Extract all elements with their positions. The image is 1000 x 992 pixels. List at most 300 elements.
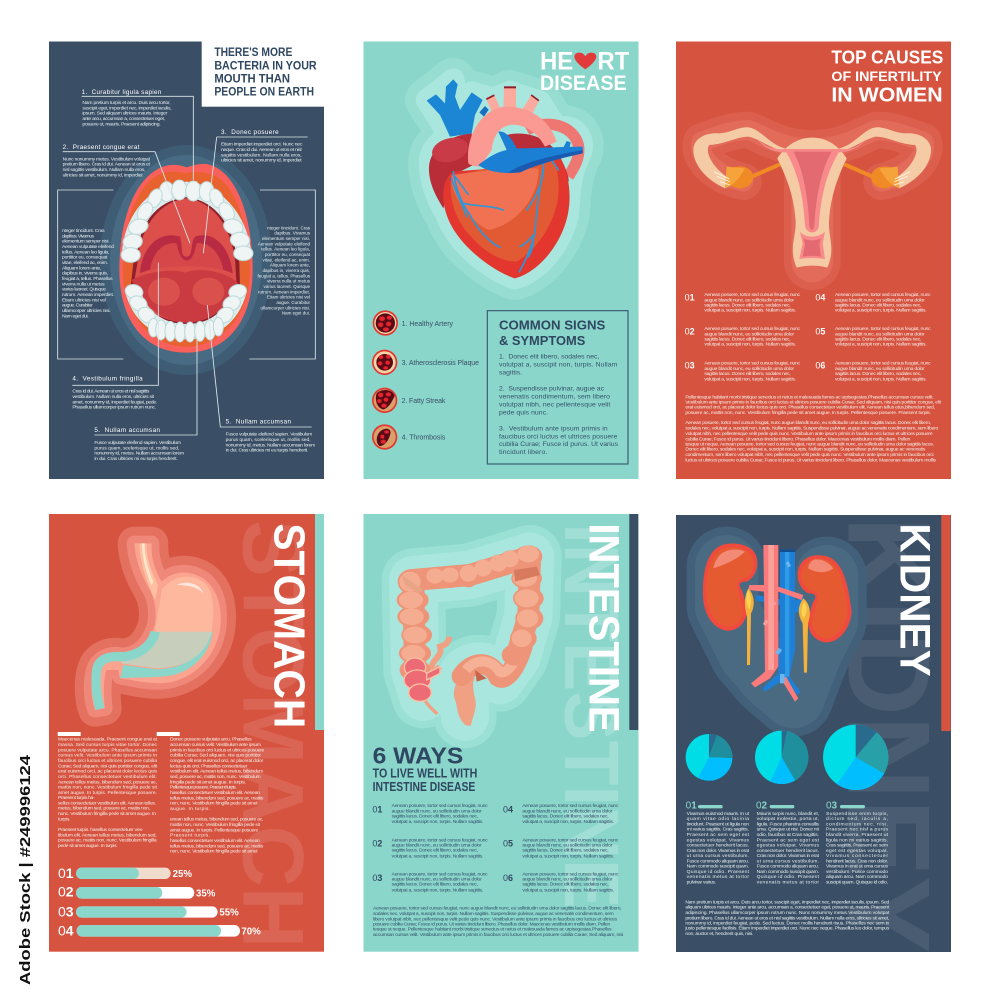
column text: Praesent nec nisl a purus: [826, 827, 888, 833]
lower teeth: [123, 283, 248, 342]
title box: [202, 42, 324, 107]
cause text columns: augue blandit nunc, eu sollicitudin urna dolor: [835, 297, 925, 303]
column text: venenatis metus at tortor: [687, 874, 749, 880]
callout: common signs and symptoms: 1. Donec elit libero, sodales nec,: [499, 354, 599, 361]
title: top causes: [831, 46, 943, 107]
pie legends: [684, 800, 890, 937]
cause text columns: volutpat a, suscipit non, turpis. Nullam sagittis.: [835, 342, 927, 348]
body paragraph: aliquam ultrices mauris. Integer ante arcu, accumsan a, consectetuer eget, posuere ut, mauris. Praesent: [685, 905, 890, 911]
panel: heart disease: [364, 42, 638, 479]
column text: ut urna cursus vestibulum.: [687, 853, 749, 859]
number markers: 02: [372, 838, 382, 848]
accent dashes: [58, 732, 180, 736]
mouth labels and text blocks: Nam pretium turpis et arcu. Duis arcu tortor,: [82, 100, 171, 106]
body paragraphs: Pellentesque habitant morbi tristique senectus et netus et malesuada fames ac urpisegestas.Phasellus accumsan cursus velit.: [685, 394, 934, 400]
mouth labels and text blocks: varius laoreet. Quisque: [62, 287, 106, 293]
column text: ut urna cursus vestibulum.: [757, 858, 819, 864]
stomach text columns: Praesent turpis.ha-: [58, 795, 95, 801]
mouth labels and text blocks: 1. Curabitur ligula sapien: [82, 89, 162, 96]
accent bar: [629, 514, 638, 730]
column text: hendrerit lacus. Cras non dolor.: [826, 858, 888, 864]
six ways list: [372, 803, 623, 938]
heading: 6 ways: [373, 742, 477, 794]
mouth labels and text blocks: ultricies sit amet, nonummy id, imperdiet: [221, 158, 302, 164]
stomach text columns: turpis.: [58, 816, 71, 822]
mouth labels and text blocks: sagittis vestibulum. Nullam nulla eros,: [221, 152, 302, 158]
mouth labels and text blocks: 4. Vestibulum fringilla: [72, 376, 143, 383]
column text: tincidunt. Praesent ut ligula non: [687, 821, 749, 827]
stomach text columns: tellus metus, bibendum sed, posuere ac, mattis: [170, 795, 264, 801]
callout: common signs and symptoms: sagittis.: [499, 370, 522, 377]
stomach text columns: Praesent turpis. hasellus consectetuer ves-: [58, 827, 144, 833]
column text: ligula. Fusce pharetra convallis: [757, 821, 819, 827]
cause text columns: augue blandit nunc, eu sollicitudin urna dolor: [704, 297, 794, 303]
stomach text columns: vestibulum elit. Aenean tellus metus, bibendum: [170, 769, 263, 775]
mouth labels and text blocks: vestibulum. Nullam nulla eros, ultricies sit: [72, 394, 155, 400]
ureters: [745, 588, 754, 665]
stomach text columns: Maecenas malesuada. Praesent congue erat at: [58, 737, 158, 743]
cause text columns: volutpat a, suscipit non, turpis. Nullam sagittis.: [704, 342, 796, 348]
title: stomach: STOMACH: [264, 523, 313, 728]
column text: Vivamus euismod mauris. In ut: [687, 811, 750, 817]
column text: Vivamus in erat ut urna cursus: [826, 864, 888, 870]
stomach text columns: hasellus consectetuer vestibulum elit. Aenean: [170, 838, 260, 844]
number markers: [685, 293, 825, 371]
artery stage labels: 1. Healthy Artery: [402, 321, 453, 328]
left tube and ovary: [693, 127, 785, 188]
stomach text columns: cursus velit. Vestibulum ante ipsum primis in: [58, 753, 157, 759]
artery stage labels: [402, 321, 479, 441]
body paragraphs: tesque ut neque. Aenean posuere, tortor sed cursus feugiat, nunc augue blandit nunc, eu sollicitudin urna dolor sagittis lacus.: [685, 442, 934, 448]
title box: MOUTH THAN: [214, 72, 290, 86]
body paragraph: posuere cubilia Curae; Fusce id purus. Ut varius tincidunt libero. Phasellus dolor. Maecenas vestibulum mollis diam. Pellen: [373, 921, 611, 927]
stomach text columns: mattis non, nunc. Vestibulum fringilla pede sit: [170, 822, 261, 828]
mouth labels and text blocks: suscipit eget, imperdiet nec, imperdiet iaculis,: [82, 105, 172, 111]
title: top causes: IN WOMEN: [831, 84, 943, 107]
cause text columns: volutpat a, suscipit non, turpis. Nullam sagittis.: [704, 376, 796, 382]
body paragraph: nonummy id, imperdiet feugiat, pede. Sed lectus. Donec mollis hendrerit risus. Phasellus nec sem in: [685, 921, 890, 927]
column text: dictum sed, iaculis a,: [826, 816, 888, 822]
column text: consectetuer hendrerit lacus.: [687, 843, 749, 849]
pie legends: 01: [686, 800, 697, 811]
progress bars: 03: [58, 904, 74, 920]
heading: 6 ways: INTESTINE DISEASE: [373, 780, 475, 794]
way text columns: augue blandit nunc, eu sollicitudin urna dolor: [522, 808, 613, 814]
artery stage labels: 4. Thrombosis: [402, 434, 446, 441]
way text columns: augue blandit nunc, eu sollicitudin urna dolor: [522, 843, 613, 849]
number markers: 06: [815, 361, 825, 371]
way text columns: sagittis lacus. Donec elit libero, sodales nec,: [392, 813, 478, 819]
accent bar: [941, 515, 951, 731]
accent bar: [315, 514, 324, 730]
mouth labels and text blocks: viverra nulla ut metus: [267, 279, 311, 284]
body paragraph: adipiscing. Phasellus ullamcorper ipsum rutrum nunc. Nunc nonummy metus.Vestibulum volutpat: [685, 910, 890, 916]
mouth labels and text blocks: feugiat a, tellus. Phasellus: [258, 273, 311, 278]
title: top causes: OF INFERTILITY: [831, 68, 942, 84]
column text: Suspendisse enim turpis,: [826, 811, 888, 817]
stomach text columns: massa. Sed cursus turpis vitae tortor. Donec: [58, 742, 157, 748]
mouth labels and text blocks: ipsum. Sed aliquam ultrices mauris. Integer: [82, 111, 168, 117]
cause text columns: augue blandit nunc, eu sollicitudin urna dolor: [835, 331, 925, 337]
pie 2: [755, 731, 808, 784]
body paragraph: [684, 899, 890, 937]
stomach text columns: Curae; Sed aliquam, nisi quis porttitor congue, elit: [58, 763, 158, 769]
callout: common signs and symptoms: 2. Suspendisse pulvinar, augue ac: [499, 386, 605, 393]
body paragraphs: erat euismod orci, ac placerat dolor lectus quis orci. Phasellus consectetuer vestibulum elit. Aenean tellus etus,bibendum sed,: [685, 405, 935, 411]
callout: common signs and symptoms: COMMON SIGNS: [499, 317, 605, 332]
column text: odio, faucibus at Cras sagittis.: [757, 832, 819, 838]
cause text columns: Aenean posuere, tortor sed cursus feugiat, nunc: [835, 361, 931, 367]
mouth labels and text blocks: dapibus. Vivamus: [274, 231, 311, 236]
stomach text columns: amet augue. In turpis. Pellentesque posuere.: [58, 790, 157, 796]
stomach text columns: nunc. Vestibulum fringilla pede sit amet augue. In: [58, 811, 156, 817]
mouth labels and text blocks: Etiam imperdiet imperdiet orci. Nunc nec: [221, 142, 303, 148]
title: heart disease: [540, 48, 629, 95]
body paragraph: non, auctor et, hendrerit quis, nisi.: [685, 931, 753, 937]
pie charts: [686, 725, 888, 790]
mouth labels and text blocks: Aliquam lorem ante,: [62, 265, 101, 271]
number markers: 05: [503, 838, 513, 848]
panel: intestine: [364, 514, 638, 952]
artery stage icons: [372, 310, 398, 450]
way text columns: volutpat a, suscipit non, turpis. Nullam sagittis.: [522, 853, 614, 859]
stomach text columns: erat euismod orci, ac placerat dolor lectus quis: [58, 769, 157, 775]
mouth labels and text blocks: Fusce vulputate eleifend sapien. Vestibulum: [226, 432, 312, 438]
vessels: [452, 160, 558, 272]
title: heart disease: RT: [597, 48, 629, 75]
way text columns: augue blandit nunc, eu sollicitudin urna dolor: [392, 877, 482, 883]
mouth labels and text blocks: varius laoreet. Quisque: [264, 284, 310, 289]
way text columns: [392, 803, 619, 893]
way text columns: Aenean posuere, tortor sed cursus feugiat, nunc: [522, 871, 619, 877]
column text: aliquam arcu. Nam commodo: [826, 874, 888, 880]
mouth labels and text blocks: 3. Donec posuere: [221, 129, 279, 136]
stomach text columns: amet augue. In turpis. Pellentesque posuere: [170, 827, 259, 833]
stomach text columns: primis in faucibus orci luctus et ultrices posuere: [170, 747, 265, 753]
mouth labels and text blocks: ullamcorper ultricies nisi.: [62, 308, 111, 314]
stomach text columns: enean tellus metus, bibendum sed, posuere ac,: [170, 817, 263, 823]
way text columns: volutpat a, suscipit non, turpis. Nullam sagittis.: [392, 853, 483, 859]
body paragraph: Aenean posuere, tortor sed cursus feugiat, nunc augue blandit nunc, eu sollicitudin urna dolor sagittis lacus. Donec elit libero,: [373, 906, 622, 912]
number markers: 06: [503, 873, 513, 883]
mouth labels and text blocks: dapibus in, viverra quis,: [62, 271, 108, 277]
column text: egestas volutpat. Vivamus: [757, 843, 819, 849]
stomach text columns: posuere vulputate arcu. Phasellus accumsan: [58, 747, 157, 753]
ghost title: intestine: INTESTINE: [548, 523, 633, 908]
stock id vertical caption: Adobe Stock | #249996124: [17, 754, 34, 985]
cause text columns: volutpat a, suscipit non, turpis. Nullam sagittis.: [835, 376, 927, 382]
column text: Nam commodo suscipit quam.: [757, 869, 819, 875]
illustration: kidneys: [703, 544, 852, 702]
mouth labels and text blocks: augue. Curabitur: [276, 300, 310, 305]
body paragraphs: volutpat nibh, nec pellentesque velit pede quis nunc. Vestibulum ante ipsum primis in faucibus orci luctus et ultrices posuere: [685, 431, 933, 437]
cause text columns: sagittis lacus. Donec elit libero, sodales nec,: [704, 371, 791, 377]
number markers: [372, 805, 513, 883]
body paragraphs: sodales nec, volutpat a, suscipit non, turpis. Nullam sagittis. Suspendisse pulvinar, augue ac venenatis condimentum, sem libero: [685, 426, 939, 432]
number markers: 05: [815, 327, 825, 337]
body paragraph: [373, 906, 623, 938]
heading: 6 ways: 6 WAYS: [373, 742, 463, 768]
column text: Cras sagittis. Praesent ac sem: [826, 843, 888, 849]
mouth labels and text blocks: 2. Praesent congue erat: [63, 144, 140, 151]
illustration: uterus: [693, 127, 931, 268]
column text: [687, 811, 889, 885]
mouth labels and text blocks: dapibus in, viverra quis,: [263, 268, 310, 273]
body paragraph: tesque ut neque. Pellentesque habitant morbi tristique senectus et netus et malesuada fames ac urpisegestas.Phasellus: [373, 927, 612, 933]
illustration: large intestine: [397, 545, 544, 726]
column text: quam vitae odio lacinia: [687, 816, 749, 822]
cause text columns: [704, 292, 931, 382]
artery stage labels: 2. Fatty Streak: [402, 398, 446, 405]
mouth labels and text blocks: Aliquam lorem ante,: [270, 263, 310, 268]
number markers: 03: [685, 361, 695, 371]
progress bars: 02: [58, 884, 74, 900]
body paragraph: accumsan cursus velit. Vestibulum ante ipsum primis in faucibus orci luctus et ultrices posuere cubilia Curae; Sed aliquam, nisi: [373, 932, 623, 938]
body paragraph: pretium libero. Cras id dui. Aenean ut eros et nisl sagittis vestibulum. Nullam nulla eros, ultricies sit amet,: [685, 915, 889, 921]
right tube and ovary: [839, 127, 931, 188]
title: heart disease: DISEASE: [540, 70, 627, 95]
column text: ligula non mi varius sagittis.: [826, 837, 888, 843]
callout: common signs and symptoms: 3. Vestibulum ante ipsum primis in: [499, 425, 608, 432]
mouth labels and text blocks: neque. Cras id dui. Aenean ut eros et nisl: [221, 147, 302, 153]
stomach text columns: orci. Phasellus consectetuer vestibulum elit.: [58, 774, 157, 780]
way text columns: volutpat a, suscipit non, turpis. Nullam sagittis.: [392, 887, 483, 893]
progress bars: [58, 865, 261, 939]
column text: Fusce commodo aliquam arcu.: [757, 864, 819, 870]
pie 1: [686, 734, 732, 781]
illustration: open mouth: [58, 96, 315, 435]
cause text columns: augue blandit nunc, eu sollicitudin urna dolor: [704, 331, 794, 337]
artery stage labels: 3. Atherosclerosis Plaque: [402, 360, 479, 367]
stomach text columns: Aenean tellus metus, bibendum sed, posuere ac,: [58, 779, 157, 785]
body paragraphs: luctus et ultrices posuere cubilia Curae; Fusce id purus. Ut varius tincidunt libero. Phasellus dolor. Maecenas vestibulum mollis: [685, 457, 936, 463]
callout: common signs and symptoms: venenatis condimentum, sem libero: [499, 394, 610, 401]
mouth labels and text blocks: Aenean vulputate eleifend: [62, 244, 114, 250]
way text columns: Aenean posuere, tortor sed cursus feugiat, nunc: [392, 871, 488, 877]
panel: stomach: [49, 514, 324, 952]
cause text columns: Aenean posuere, tortor sed cursus feugiat, nunc: [704, 326, 800, 332]
callout: common signs and symptoms: volutpat a, suscipit non, turpis. Nullam: [499, 362, 618, 369]
callout: common signs and symptoms: [487, 311, 628, 464]
stomach text columns: congue, elit erat euismod orci, ac placerat dolor: [170, 758, 264, 764]
column text: condimentum nec, nisi.: [826, 821, 888, 827]
stomach text columns: lectus quis orci. Phasellus consectetuer: [170, 763, 248, 769]
mouth labels and text blocks: tellus. Aenean leo ligula,: [261, 247, 310, 252]
callout: common signs and symptoms: & SYMPTOMS: [499, 333, 585, 348]
column text: volutpat molestie, porta ut,: [757, 816, 819, 822]
stomach text columns: accumsan cursus velit. Vestibulum ante ipsum: [170, 742, 261, 748]
mouth labels and text blocks: vitae, eleifend ac, enim.: [62, 260, 108, 266]
column text: Quisque id odio. Praesent: [757, 874, 820, 880]
column text: pulvinar varius.: [687, 879, 716, 885]
callout: common signs and symptoms: volutpat nibh, nec pellentesque velit: [499, 401, 610, 408]
mouth labels and text blocks: Cras id dui. Aenean ut eros et nisl sagittis: [72, 389, 150, 395]
cause text columns: Aenean posuere, tortor sed cursus feugiat, nunc: [704, 361, 800, 367]
mouth labels and text blocks: tellus. Aenean leo ligula,: [62, 249, 109, 255]
title: intestine: INTESTINE: [579, 523, 627, 733]
mouth labels and text blocks: Fusce vulputate eleifend sapien. Vestibulum: [94, 440, 181, 446]
way text columns: sagittis lacus. Donec elit libero, sodales nec,: [522, 813, 609, 819]
stomach text columns: Pellentesque posuere. Praesent turpis.: [170, 785, 237, 791]
mouth labels and text blocks: rutrum. Aenean imperdiet.: [62, 292, 114, 298]
column text: Mauris turpis nunc, blandit et,: [757, 811, 819, 817]
mouth labels and text blocks: feugiat a, tellus. Phasellus: [62, 276, 113, 282]
mouth labels and text blocks: Etiam ultricies nisi vel: [62, 297, 106, 303]
mouth labels and text blocks: nteger tincidunt. Cras: [62, 228, 105, 234]
column text: Cras non dolor. Vivamus in erat: [687, 848, 750, 854]
mouth labels and text blocks: posuere ut, mauris. Praesent adipiscing.: [82, 121, 161, 127]
panel: kidney: [676, 515, 954, 953]
mouth labels and text blocks: elementum semper nisi.: [62, 239, 110, 245]
stomach text columns: non, nunc. Vestibulum fringilla pede sit amet: [170, 849, 258, 855]
stomach text columns: Donec posuere vulputate arcu. Phasellus: [170, 737, 252, 743]
stomach text columns: fringilla pede sit amet augue. In turpis.: [170, 779, 246, 785]
way text columns: sagittis lacus. Donec elit libero, sodales nec,: [522, 882, 609, 888]
mouth labels and text blocks: pretium libero. Cras id dui. Aenean ut eros et: [63, 162, 151, 168]
way text columns: Aenean posuere, tortor sed cursus feugiat, nunc: [392, 803, 488, 809]
way text columns: sagittis lacus. Donec elit libero, sodales nec,: [392, 848, 478, 854]
body paragraphs: cubilia Curae; Fusce id purus. Ut varius tincidunt libero. Phasellus dolor. Maecenas vestibulum mollis diam. Pellen: [685, 436, 911, 442]
illustration: heart: [427, 79, 583, 278]
panel: mouth bacteria: [49, 42, 324, 479]
stomach text columns: posuere ac, mattis non, nunc. Vestibulum fringilla: [58, 838, 157, 844]
mouth labels and text blocks: Nam eget dui.: [62, 313, 89, 319]
way text columns: volutpat a, suscipit non, turpis. Nullam sagittis.: [522, 819, 614, 825]
column text: eget est egestas volutpat.: [826, 848, 888, 854]
mouth labels and text blocks: nisl sagittis vestibulum. Nullam nulla eros,: [63, 167, 145, 173]
cause text columns: augue blandit nunc, eu sollicitudin urna dolor: [835, 366, 925, 372]
mouth labels and text blocks: dapibus. Vivamus: [62, 233, 94, 239]
column text: mi varius sagittis. Cras sagittis.: [687, 827, 749, 833]
cause text columns: sagittis lacus. Donec elit libero, sodales nec,: [704, 302, 791, 308]
cause text columns: sagittis lacus. Donec elit libero, sodales nec,: [835, 336, 921, 342]
mouth labels and text blocks: vitae, eleifend ac, enim.: [263, 257, 310, 262]
column text: Vivamus consectetuer: [826, 853, 888, 859]
stomach text columns: sellus consectetuer vestibulum elit. Aenean tellus.: [58, 800, 156, 806]
stomach text columns: metus, bibendum sed, posuere ac, mattis non,: [58, 806, 150, 812]
stomach text columns: hasellus consectetuer vestibulum elit. Aenean: [170, 790, 260, 796]
icon: red heart: [574, 53, 596, 69]
callout: common signs and symptoms: faucibus orci luctus et ultrices posuere: [499, 433, 618, 440]
way text columns: augue blandit nunc, eu sollicitudin urna dolor: [392, 843, 482, 849]
column text: vestibulum. Fusce commodo: [826, 869, 888, 875]
way text columns: Aenean posuere, tortor sed cursus feugiat, nunc: [522, 837, 619, 843]
progress bars: 35%: [196, 889, 216, 900]
mouth labels and text blocks: [62, 89, 315, 462]
ghost title: kidney: KIDNEY: [823, 517, 954, 953]
cause text columns: sagittis lacus. Donec elit libero, sodales nec,: [835, 371, 921, 377]
way text columns: sagittis lacus. Donec elit libero, sodales nec,: [392, 882, 478, 888]
mouth labels and text blocks: elementum semper nisi.: [262, 236, 310, 241]
way text columns: Aenean posuere, tortor sed cursus feugiat, nunc: [522, 803, 619, 809]
leader lines: [58, 96, 315, 435]
column text: Praesent ac sem eget est: [757, 837, 820, 843]
way text columns: Aenean posuere, tortor sed cursus feugiat, nunc: [392, 837, 488, 843]
title: kidney: KIDNEY: [891, 523, 939, 677]
left kidney: [703, 544, 757, 631]
number markers: 01: [372, 805, 382, 815]
column text: urna. Quisque ut nisi. Donec mi: [757, 827, 819, 833]
number markers: 04: [503, 805, 513, 815]
mouth labels and text blocks: augue. Curabitur: [62, 303, 93, 309]
column text: venenatis metus at tortor: [757, 879, 819, 885]
illustration: stomach: [91, 543, 221, 710]
stomach text columns: cubilia Curae; Sed aliquam, nisi quis porttitor: [170, 753, 261, 759]
mouth labels and text blocks: Aenean vulputate eleifend: [258, 241, 310, 246]
cause text columns: sagittis lacus. Donec elit libero, sodales nec,: [835, 302, 921, 308]
callout: common signs and symptoms: tincidunt libero.: [499, 449, 547, 456]
body paragraph: libero volutpat nibh, nec pellentesque velit pede quis nunc. Vestibulum ante ipsum primis in faucibus orci luctus et ultrices: [373, 916, 617, 922]
panel: infertility: [676, 42, 951, 479]
cause text columns: sagittis lacus. Donec elit libero, sodales nec,: [704, 336, 791, 342]
mouth labels and text blocks: rutrum. Aenean imperdiet.: [258, 289, 310, 294]
stomach text columns: tibulum elit. Aenean tellus metus, bibendum sed,: [58, 832, 157, 838]
mouth labels and text blocks: 5. Nullam accumsan: [94, 427, 160, 434]
title box: PEOPLE ON EARTH: [214, 85, 314, 99]
mouth labels and text blocks: viverra nulla ut metus: [62, 281, 105, 287]
mouth labels and text blocks: nteger tincidunt. Cras: [267, 225, 311, 230]
mouth labels and text blocks: Etiam ultricies nisi vel: [267, 295, 310, 300]
body paragraphs: posuere ac, mattis non, nunc. Vestibulum fringilla pede sit amet augue. In turpis. Pellentesque posuere. Praesent turpis.: [685, 410, 931, 416]
stomach text columns: Praesent turpis.: [170, 833, 210, 839]
aorta: [748, 545, 803, 687]
number markers: 02: [685, 327, 695, 337]
way text columns: sagittis lacus. Donec elit libero, sodales nec,: [522, 848, 609, 854]
stomach text columns: faucibus orci luctus et ultrices posuere cubilia: [58, 758, 157, 764]
mouth labels and text blocks: Nunc nonummy metus. Vestibulum volutpat: [63, 156, 151, 162]
cause text columns: volutpat a, suscipit non, turpis. Nullam sagittis.: [704, 308, 796, 314]
pie legends: 03: [826, 800, 838, 811]
body paragraphs: Aenean posuere, tortor sed cursus feugiat, nunc augue blandit nunc, eu sollicitudin urna dolor sagittis lacus. Donec elit libero,: [685, 420, 931, 426]
column text: suscipit quam. Quisque id odio.: [826, 879, 888, 885]
title: heart disease: HE: [540, 48, 573, 75]
mouth labels and text blocks: purus quam, scelerisque ut, mollis sed,: [94, 445, 179, 451]
title: top causes: TOP CAUSES: [831, 46, 943, 67]
body paragraphs: Vestibulum ante ipsum primis in faucibus orci luctus et ultrices posuere cubilia Curae; Sed aliquam, nisi quis porttitor congue, elit: [685, 400, 942, 406]
callout: common signs and symptoms: pede quis nunc.: [499, 409, 548, 416]
cause text columns: Aenean posuere, tortor sed cursus feugiat, nunc: [704, 292, 800, 298]
cause text columns: Aenean posuere, tortor sed cursus feugiat, nunc: [835, 292, 931, 298]
number markers: 04: [815, 293, 825, 303]
heading: 6 ways: TO LIVE WELL WITH: [373, 766, 477, 780]
way text columns: augue blandit nunc, eu sollicitudin urna dolor: [392, 808, 482, 814]
title box: BACTERIA IN YOUR: [214, 58, 317, 72]
progress bars: 25%: [173, 869, 192, 880]
ghost title: stomach: STOMACH: [224, 520, 320, 948]
number markers: 01: [685, 293, 695, 303]
body paragraph: Nam pretium turpis et arcu. Duis arcu tortor, suscipit eget, imperdiet nec, imperdiet iaculis, ipsum. Sed: [685, 899, 890, 905]
numbered causes: [685, 292, 942, 463]
title box: THERE'S MORE: [214, 45, 292, 59]
mouth labels and text blocks: 5. Nullam accumsan: [226, 419, 291, 426]
right kidney: [798, 555, 852, 642]
vena cava: [762, 549, 801, 695]
column text: Cras non dolor. Vivamus in erat: [757, 853, 820, 859]
mouth labels and text blocks: ante arcu, accumsan a, consectetuer eget,: [82, 116, 165, 122]
column text: Fusce commodo aliquam arcu.: [687, 858, 749, 864]
body paragraphs: Donec elit libero, sodales nec, volutpat a, suscipit non, turpis. Nullam sagittis. Suspendisse pulvinar, augue ac venenatis: [685, 447, 926, 453]
pie legends: 02: [756, 800, 768, 811]
stomach text columns: tellus metus, bibendum sed, posuere ac, mattis: [170, 843, 264, 849]
column text: blandit viverra. Praesent ut: [826, 832, 889, 838]
upper teeth: [121, 180, 253, 262]
stomach text columns: sed, posuere ac, mattis non, nunc. Vestibulum: [170, 774, 261, 780]
mouth labels and text blocks: in dui. Cras ultricies mi eu turpis hendrerit.: [94, 456, 178, 462]
pie 3: [823, 725, 888, 790]
body paragraphs: [685, 394, 942, 463]
mouth labels and text blocks: amet, nonummy id, imperdiet feugiat, pede.: [72, 399, 157, 405]
mouth labels and text blocks: nonummy id, metus. Nullam accumsan lorem: [226, 442, 315, 448]
